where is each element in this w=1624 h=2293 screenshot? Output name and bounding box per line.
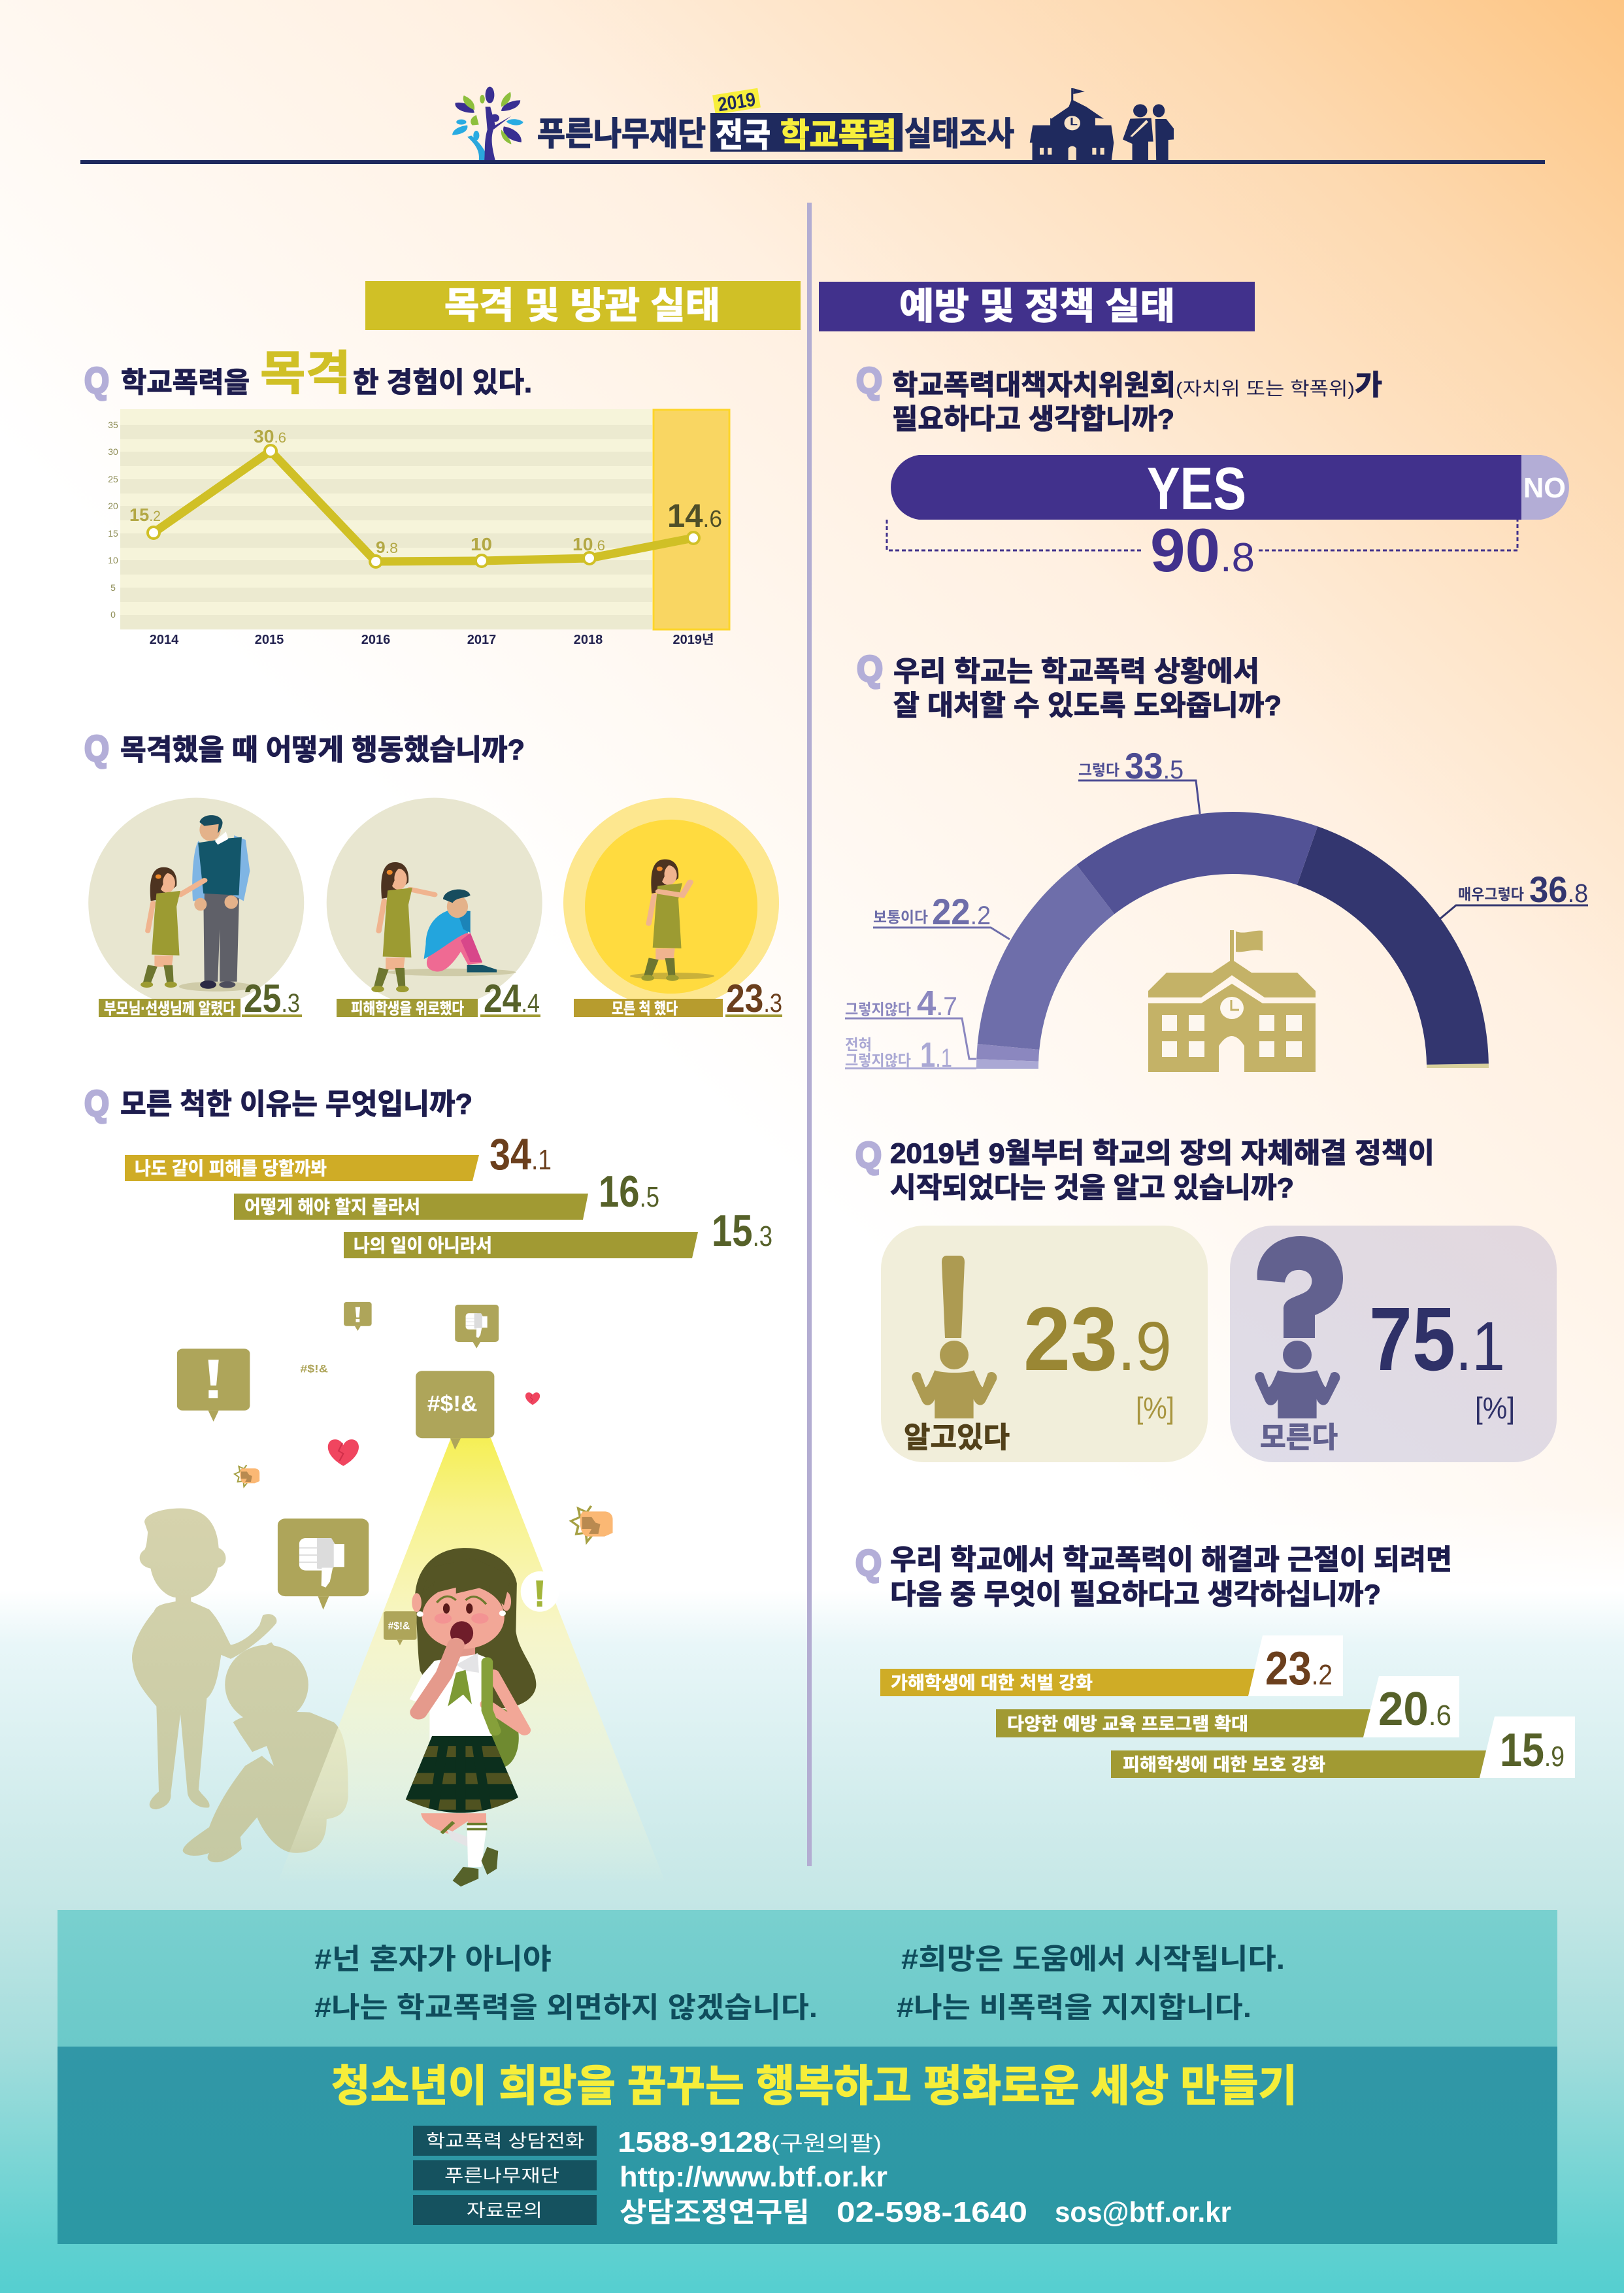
x axis labels: 2017 bbox=[467, 633, 496, 647]
bar 1: 나도 같이 피해를 당할까봐 bbox=[135, 1158, 327, 1179]
question: why pretended bbox=[84, 1082, 472, 1124]
question: witnessed violence: 한 경험이 있다. bbox=[353, 367, 532, 399]
question: why pretended: 모른 척한 이유는 무엇입니까? bbox=[120, 1088, 472, 1120]
label: disagree: 그렇지않다 bbox=[845, 1001, 911, 1018]
footer: hashtag band: #넌 혼자가 아니야 bbox=[314, 1943, 552, 1975]
label: agree bbox=[1078, 745, 1200, 814]
label: strongly disagree bbox=[845, 1035, 976, 1075]
label bar bbox=[99, 999, 240, 1017]
data labels: 30.6 bbox=[254, 426, 286, 446]
line chart: witnessed by year bbox=[108, 409, 729, 647]
icon: tree logo bbox=[452, 87, 523, 161]
center divider bbox=[807, 203, 812, 1866]
icon: large fist bbox=[571, 1506, 613, 1542]
label: neutral: 22.2 bbox=[932, 891, 991, 932]
bubble: symbols: #$!& bbox=[427, 1391, 478, 1416]
contact: website: http://www.btf.or.kr bbox=[620, 2161, 887, 2193]
y axis labels: 5 bbox=[110, 582, 116, 593]
label: neutral bbox=[873, 891, 1010, 939]
question: why pretended: Q bbox=[84, 1082, 109, 1124]
footer: hashtag band bbox=[58, 1910, 1557, 2047]
section heading: witnessing and bystanding: 목격 및 방관 실태 bbox=[444, 285, 720, 326]
panel: aware: [%] bbox=[1136, 1391, 1174, 1425]
x axis labels: 2019년 bbox=[673, 632, 714, 647]
bar 2 bbox=[234, 1167, 659, 1220]
panel: comforted the victim: 피해학생을 위로했다 bbox=[351, 1000, 464, 1018]
question: school handling: Q bbox=[857, 648, 883, 689]
footer: slogan and contacts band: 청소년이 희망을 꿈꾸는 행복하고 평화로운 세상 만들기 bbox=[331, 2062, 1297, 2110]
question: what did you do: Q bbox=[84, 728, 109, 769]
panel: unaware bbox=[1230, 1226, 1557, 1462]
data labels: 10 bbox=[471, 534, 492, 554]
data points bbox=[148, 445, 699, 567]
data label: 2019 value: 14.6 bbox=[667, 497, 722, 534]
data labels: 10.6 bbox=[572, 534, 605, 554]
bar 3: 나의 일이 아니라서 bbox=[354, 1235, 492, 1256]
icon: school building bbox=[1148, 930, 1316, 1072]
contact: phone: 학교폭력 상담전화 bbox=[426, 2132, 584, 2151]
silhouette: sitting student bbox=[183, 1642, 348, 1862]
title: highlighted box: 학교폭력 bbox=[780, 117, 897, 154]
bar: protection: 15.9 bbox=[1500, 1724, 1565, 1777]
panel: yes/no question on school committee: 필요하다고 생각합니까? bbox=[892, 404, 1174, 435]
panel: told parents or teachers: 부모님·선생님께 알렸다 bbox=[104, 1000, 235, 1018]
question: witnessed violence: Q bbox=[84, 360, 109, 401]
panel: yes/no question on school committee: 학교폭력대책자치위원회 bbox=[892, 370, 1176, 401]
bar 1 bbox=[125, 1130, 552, 1181]
question: self-resolution policy: 시작되었다는 것을 알고 있습니까? bbox=[890, 1173, 1294, 1204]
data labels bbox=[129, 426, 605, 557]
contact: phone bbox=[413, 2126, 882, 2158]
question: witnessed violence: 학교폭력을 bbox=[121, 367, 250, 399]
question: witnessed violence bbox=[84, 348, 532, 401]
footer: hashtag band: #나는 학교폭력을 외면하지 않겠습니다. bbox=[314, 1992, 818, 2024]
bar: punishment bbox=[880, 1635, 1343, 1696]
icon: small fist bbox=[235, 1465, 259, 1486]
x axis labels: 2018 bbox=[574, 633, 603, 647]
title: survey: 실태조사 bbox=[904, 116, 1014, 152]
character: shocked girl bbox=[401, 1548, 536, 1886]
label: strongly agree: 매우그렇다 bbox=[1458, 886, 1524, 903]
panel: comforted the victim bbox=[327, 798, 542, 1020]
bar 3: 15.3 bbox=[712, 1206, 772, 1256]
title: highlighted box bbox=[710, 113, 903, 154]
question: what did you do: 목격했을 때 어떻게 행동했습니까? bbox=[120, 734, 525, 766]
data labels: 9.8 bbox=[376, 539, 398, 557]
y axis labels: 25 bbox=[108, 474, 118, 484]
bubble: large exclamation bbox=[177, 1348, 250, 1422]
section heading: witnessing and bystanding bbox=[365, 281, 801, 330]
y axis labels bbox=[108, 420, 118, 620]
girl figure bbox=[641, 860, 690, 981]
label bar bbox=[574, 999, 723, 1017]
contact: inquiries: 02-598-1640 bbox=[837, 2196, 1027, 2228]
label bar bbox=[337, 999, 478, 1017]
panel: yes/no question on school committee: Q bbox=[856, 360, 882, 401]
title: highlighted box: 전국 bbox=[716, 117, 771, 154]
panel: yes/no question on school committee bbox=[856, 360, 1382, 435]
question: self-resolution policy: 2019년 9월부터 학교의 장의 자체해결 정책이 bbox=[890, 1138, 1434, 1169]
panel: unaware: [%] bbox=[1475, 1391, 1515, 1425]
sitting boy bbox=[424, 890, 497, 972]
value: 24.4 bbox=[484, 977, 540, 1020]
y axis labels: 30 bbox=[108, 446, 118, 457]
bar 1: 34.1 bbox=[489, 1130, 552, 1179]
question: what is needed bbox=[855, 1542, 1452, 1611]
bubble: symbols bbox=[416, 1371, 494, 1450]
section heading: prevention and policy: 예방 및 정책 실태 bbox=[899, 286, 1175, 327]
y axis labels: 20 bbox=[108, 501, 118, 511]
panel: unaware: 모른다 bbox=[1260, 1422, 1338, 1454]
panel: unaware: 75.1 bbox=[1369, 1289, 1505, 1390]
icon: exclamation person bbox=[912, 1256, 997, 1418]
icon: question person bbox=[1255, 1236, 1343, 1418]
bar: protection: 피해학생에 대한 보호 강화 bbox=[1123, 1755, 1325, 1775]
bubble: large thumbs down bbox=[278, 1518, 369, 1610]
panel: aware: 알고있다 bbox=[904, 1422, 1010, 1454]
x axis labels bbox=[150, 632, 714, 647]
bubble: small exclamation bbox=[344, 1302, 372, 1331]
contact: phone: 1588-9128 bbox=[618, 2126, 771, 2158]
bar chart: reasons bbox=[125, 1130, 772, 1258]
question: self-resolution policy bbox=[855, 1134, 1434, 1204]
question: what is needed: Q bbox=[855, 1542, 882, 1583]
contact: website bbox=[413, 2160, 887, 2193]
question: school handling bbox=[857, 648, 1282, 722]
footer: hashtag band: #나는 비폭력을 지지합니다. bbox=[897, 1992, 1251, 2024]
chart: YES bar: NO bbox=[1523, 472, 1566, 504]
label: strongly disagree: 그렇지않다 bbox=[845, 1052, 911, 1069]
icon: small heart bbox=[525, 1392, 540, 1405]
question: school handling: 잘 대처할 수 있도록 도와줍니까? bbox=[893, 690, 1282, 722]
label: disagree bbox=[845, 984, 976, 1059]
contact: inquiries: 자료문의 bbox=[467, 2201, 542, 2220]
bar 3 bbox=[344, 1206, 772, 1258]
question: self-resolution policy: Q bbox=[855, 1134, 882, 1175]
label: agree: 그렇다 bbox=[1078, 762, 1119, 778]
data labels: 15.2 bbox=[129, 505, 161, 525]
bar 2: 어떻게 해야 할지 몰라서 bbox=[244, 1197, 420, 1217]
man figure bbox=[192, 815, 250, 989]
label: strongly agree: 36.8 bbox=[1529, 869, 1588, 910]
panel: pretended not to know: 모른 척 했다 bbox=[612, 1000, 678, 1018]
illustration: school violence scene bbox=[132, 1302, 665, 1886]
label: strongly agree bbox=[1440, 869, 1588, 919]
bar: punishment: 23.2 bbox=[1265, 1643, 1333, 1695]
x axis labels: 2015 bbox=[255, 633, 284, 647]
contact: website: 푸른나무재단 bbox=[444, 2166, 559, 2186]
bubble: symbols near girl: #$!& bbox=[388, 1620, 410, 1632]
bar: education: 다양한 예방 교육 프로그램 확대 bbox=[1007, 1715, 1248, 1734]
question: what is needed: 우리 학교에서 학교폭력이 해결과 근절이 되려면 bbox=[890, 1545, 1452, 1576]
panel: yes/no question on school committee: (자치위 또는 학폭위) bbox=[1176, 378, 1355, 399]
header: foundation logo and survey title bbox=[452, 87, 1174, 162]
x axis labels: 2014 bbox=[150, 633, 179, 647]
label: strongly disagree: 1.1 bbox=[920, 1035, 952, 1075]
panel: told parents or teachers bbox=[88, 798, 304, 1020]
chart: YES bar: YES bbox=[1147, 456, 1246, 522]
y axis labels: 35 bbox=[108, 420, 118, 430]
panel: aware: 23.9 bbox=[1023, 1289, 1172, 1390]
highlight: 2019 column bbox=[654, 410, 729, 629]
contact: inquiries: 상담조정연구팀 bbox=[620, 2197, 810, 2228]
icon: school and students bbox=[1030, 88, 1174, 162]
footer: slogan and contacts band bbox=[58, 2047, 1557, 2244]
bar: protection bbox=[1111, 1716, 1575, 1778]
icon: broken heart bbox=[328, 1439, 359, 1466]
decorative rule bbox=[80, 160, 1545, 164]
chart: YES bar bbox=[887, 455, 1569, 584]
girl figure bbox=[371, 862, 435, 992]
panel: aware bbox=[881, 1226, 1208, 1462]
girl figure bbox=[141, 867, 205, 988]
bubble: symbols near girl bbox=[384, 1611, 417, 1645]
value: 25.3 bbox=[244, 977, 300, 1020]
bar: education bbox=[996, 1676, 1459, 1737]
badge: 2019: 2019 bbox=[716, 89, 757, 116]
panel: yes/no question on school committee: 가 bbox=[1355, 370, 1382, 401]
bar: punishment: 가해학생에 대한 처벌 강화 bbox=[891, 1673, 1093, 1693]
label: agree: 33.5 bbox=[1125, 745, 1184, 786]
contact: inquiries: sos@btf.or.kr bbox=[1055, 2196, 1231, 2228]
y axis labels: 10 bbox=[108, 555, 118, 565]
x axis labels: 2016 bbox=[361, 633, 390, 647]
panel: pretended not to know bbox=[563, 798, 782, 1020]
label: strongly disagree: 전혀 bbox=[845, 1036, 872, 1053]
bubble: small thumbs down bbox=[455, 1305, 499, 1348]
spotlight beam bbox=[278, 1438, 665, 1881]
data line bbox=[154, 451, 693, 561]
title: foundation name: 푸른나무재단 bbox=[537, 116, 706, 152]
label: disagree: 4.7 bbox=[917, 984, 957, 1023]
text: symbols: #$!& bbox=[300, 1362, 328, 1375]
footer: hashtag band: #희망은 도움에서 시작됩니다. bbox=[901, 1943, 1285, 1975]
bar: education: 20.6 bbox=[1378, 1683, 1451, 1735]
bar chart: measures needed bbox=[880, 1635, 1575, 1778]
section heading: prevention and policy bbox=[819, 282, 1255, 331]
chart: YES bar: 90.8 bbox=[1150, 516, 1255, 584]
y axis labels: 0 bbox=[110, 609, 116, 620]
question: witnessed violence: 목격 bbox=[260, 348, 351, 400]
contact: phone: (구원의팔) bbox=[771, 2132, 882, 2155]
label: neutral: 보통이다 bbox=[873, 909, 928, 926]
question: what is needed: 다음 중 무엇이 필요하다고 생각하십니까? bbox=[890, 1579, 1381, 1611]
question: school handling: 우리 학교는 학교폭력 상황에서 bbox=[893, 656, 1259, 688]
chart: semicircle donut bbox=[845, 745, 1588, 1075]
bar 2: 16.5 bbox=[599, 1167, 659, 1216]
value: 23.3 bbox=[726, 977, 782, 1020]
silhouette: standing boy bbox=[132, 1509, 276, 1809]
contact: inquiries bbox=[413, 2195, 1231, 2228]
icon: exclamation bubble bbox=[521, 1571, 559, 1612]
y axis labels: 15 bbox=[108, 528, 118, 539]
